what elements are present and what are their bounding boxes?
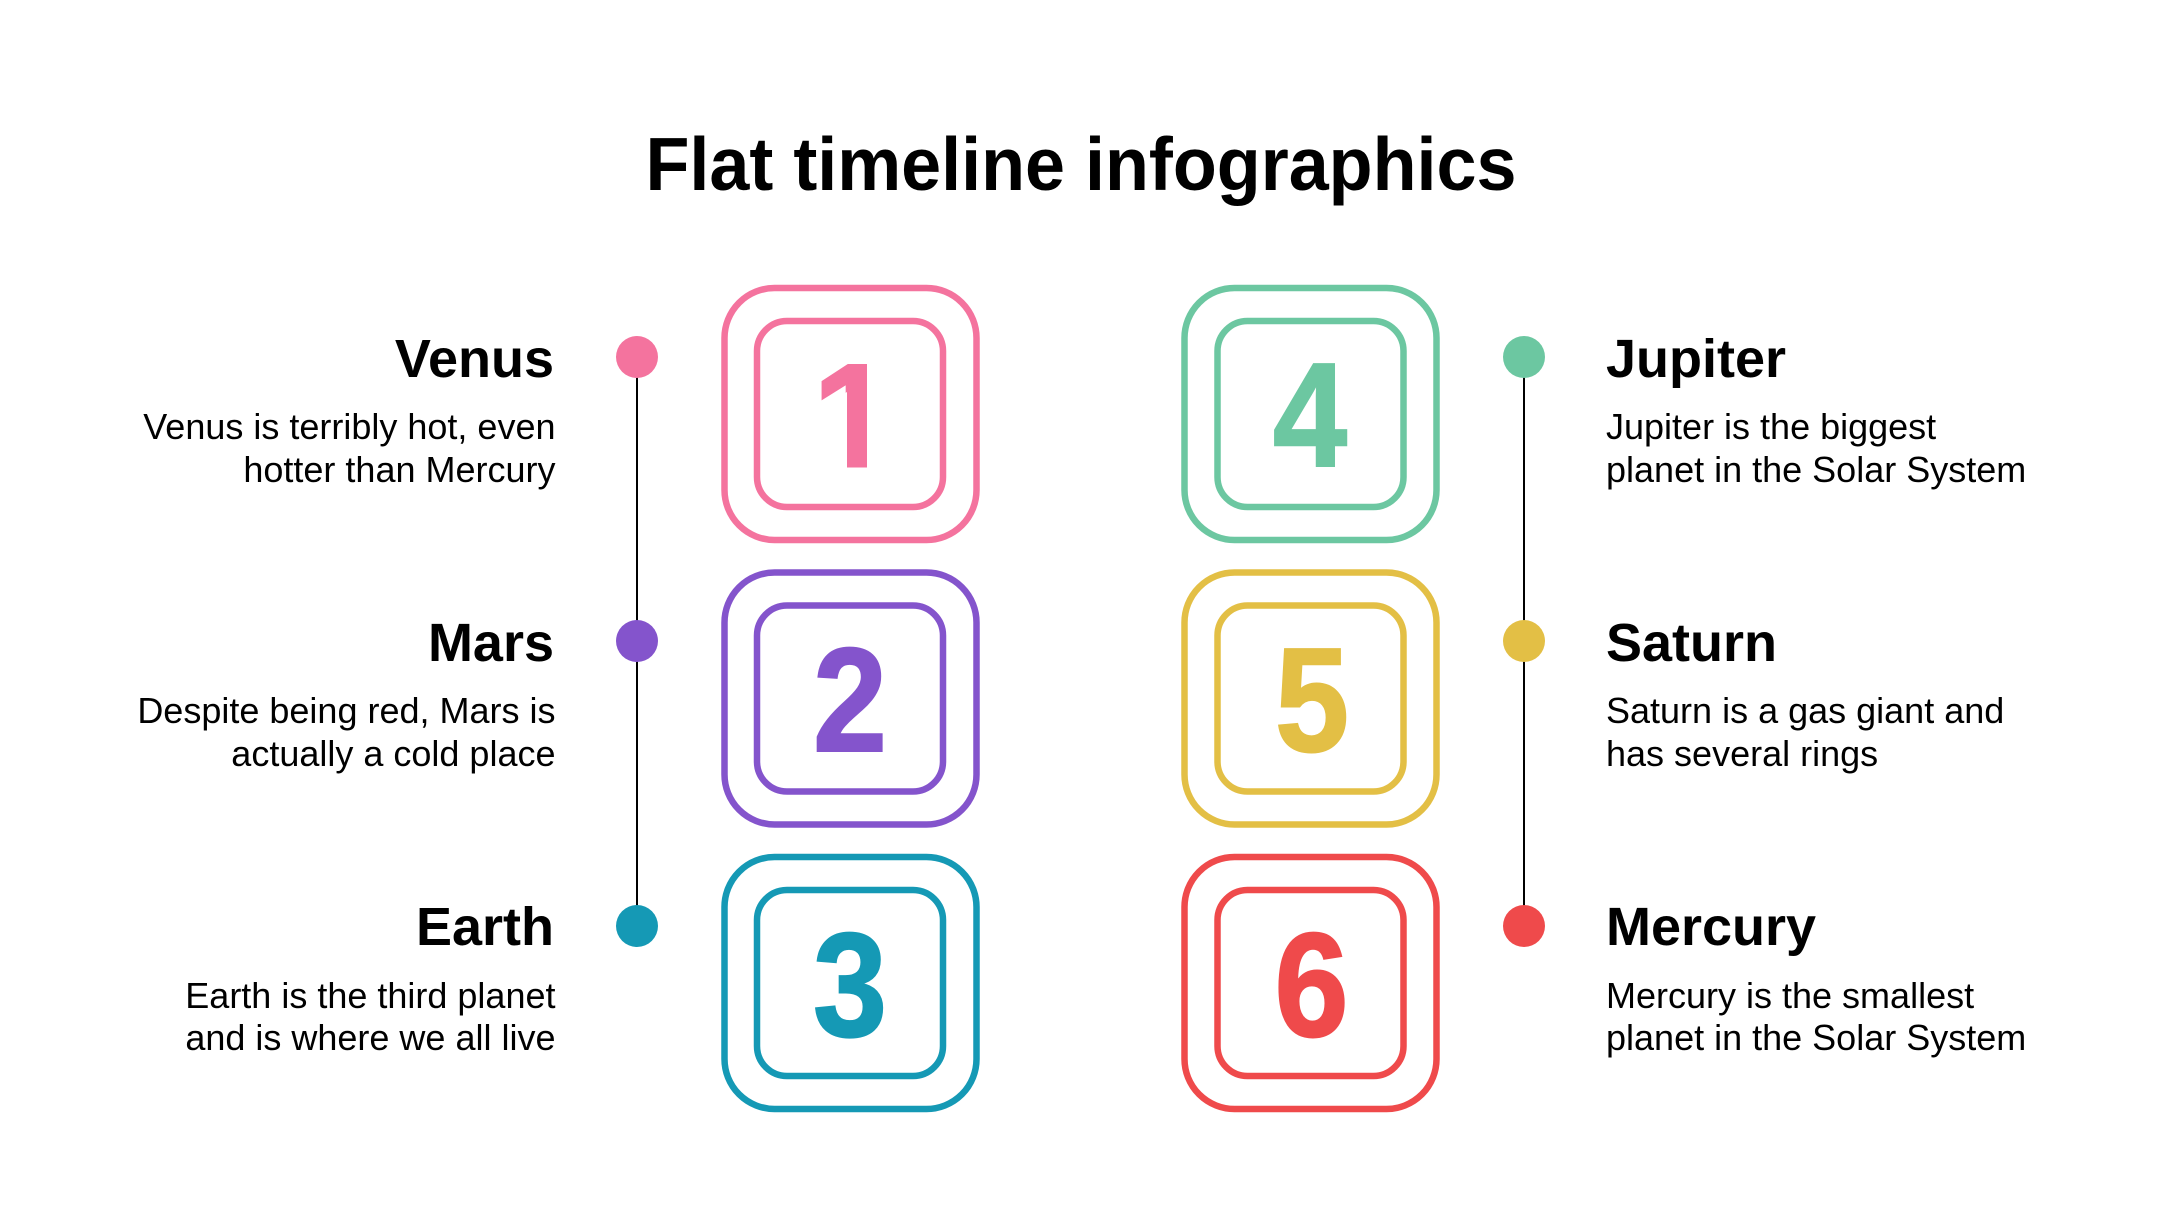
Venus timeline dot: [616, 336, 658, 378]
Mercury timeline dot: [1503, 905, 1545, 947]
Venus description: Venus is terribly hot, even: [143, 406, 556, 447]
number 5: 5: [1275, 618, 1349, 783]
title: Flat timeline infographics: [646, 122, 1516, 206]
number 6: 6: [1274, 903, 1349, 1068]
Earth timeline dot: [616, 905, 658, 947]
Earth description: Earth is the third planet: [185, 975, 556, 1016]
Venus number box: [724, 288, 976, 540]
number 4: 4: [1273, 333, 1347, 498]
Mercury heading: Mercury: [1606, 897, 1816, 957]
panel: Mercury item: [1184, 857, 2026, 1109]
Jupiter timeline dot: [1503, 336, 1545, 378]
Saturn description: has several rings: [1606, 733, 1878, 774]
panel: Saturn item: [1184, 572, 2004, 824]
panel: Venus item: [143, 288, 976, 540]
Jupiter heading: Jupiter: [1606, 329, 1786, 389]
Saturn timeline dot: [1503, 620, 1545, 662]
Mercury number box: [1184, 857, 1436, 1109]
Mars heading: Mars: [428, 613, 554, 673]
Saturn number box: [1184, 572, 1436, 824]
right timeline line: [1523, 357, 1525, 926]
Jupiter description: planet in the Solar System: [1606, 449, 2026, 490]
Earth number box: [724, 857, 976, 1109]
Saturn heading: Saturn: [1606, 613, 1777, 673]
panel: Jupiter item: [1184, 288, 2026, 540]
Mars description: actually a cold place: [231, 733, 556, 774]
Earth description: and is where we all live: [185, 1017, 556, 1058]
number 1: 1: [813, 334, 894, 497]
Mars number box: [724, 572, 976, 824]
Venus description: hotter than Mercury: [243, 449, 556, 490]
Earth heading: Earth: [416, 897, 554, 957]
panel: Mars item: [137, 572, 976, 824]
Venus heading: Venus: [395, 329, 554, 389]
panel: Earth item: [185, 857, 976, 1109]
Jupiter description: Jupiter is the biggest: [1606, 406, 1936, 447]
number 2: 2: [813, 618, 887, 783]
Mars timeline dot: [616, 620, 658, 662]
Saturn description: Saturn is a gas giant and: [1606, 690, 2004, 731]
Mercury description: Mercury is the smallest: [1606, 975, 1974, 1016]
Mercury description: planet in the Solar System: [1606, 1017, 2026, 1058]
Mars description: Despite being red, Mars is: [137, 690, 556, 731]
Jupiter number box: [1184, 288, 1436, 540]
number 3: 3: [813, 903, 887, 1068]
left timeline line: [636, 357, 638, 926]
